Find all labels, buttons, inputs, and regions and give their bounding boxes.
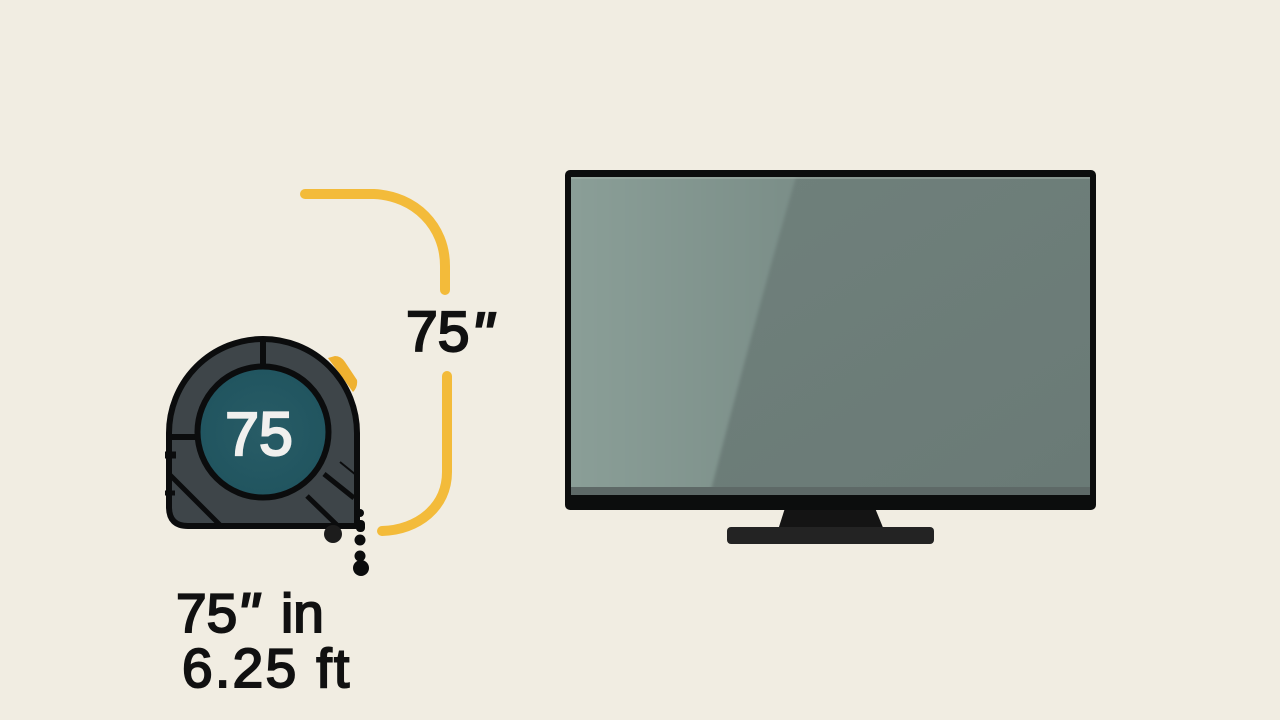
tape tab <box>328 356 357 392</box>
tv stand neck <box>778 508 884 530</box>
screen top highlight <box>571 177 1090 179</box>
icon: tape measure <box>165 338 369 576</box>
size label: 75 inches: 75 <box>406 300 469 364</box>
dangling tape hook <box>353 509 369 576</box>
tv stand base <box>727 527 934 544</box>
tape body <box>169 339 357 526</box>
caption line: inches: " <box>237 581 261 648</box>
size label: 75 inches: " <box>471 301 496 370</box>
body seams <box>165 338 356 527</box>
caption line: feet: 6.25 ft <box>182 637 352 699</box>
measurement caption <box>176 581 352 699</box>
caption line: inches: in <box>281 582 324 644</box>
tape foot <box>324 525 342 543</box>
tv frame <box>565 170 1096 510</box>
bracket lower arm <box>382 376 447 531</box>
screen sheen <box>560 170 798 490</box>
screen lower strip <box>571 487 1090 495</box>
measurement bracket <box>305 194 447 531</box>
icon: television <box>560 170 1096 544</box>
tv screen <box>560 170 1090 496</box>
caption line: inches: 75 <box>176 582 237 644</box>
bracket upper arm <box>305 194 445 290</box>
dial <box>198 366 328 498</box>
dial number: 75 <box>225 400 293 468</box>
